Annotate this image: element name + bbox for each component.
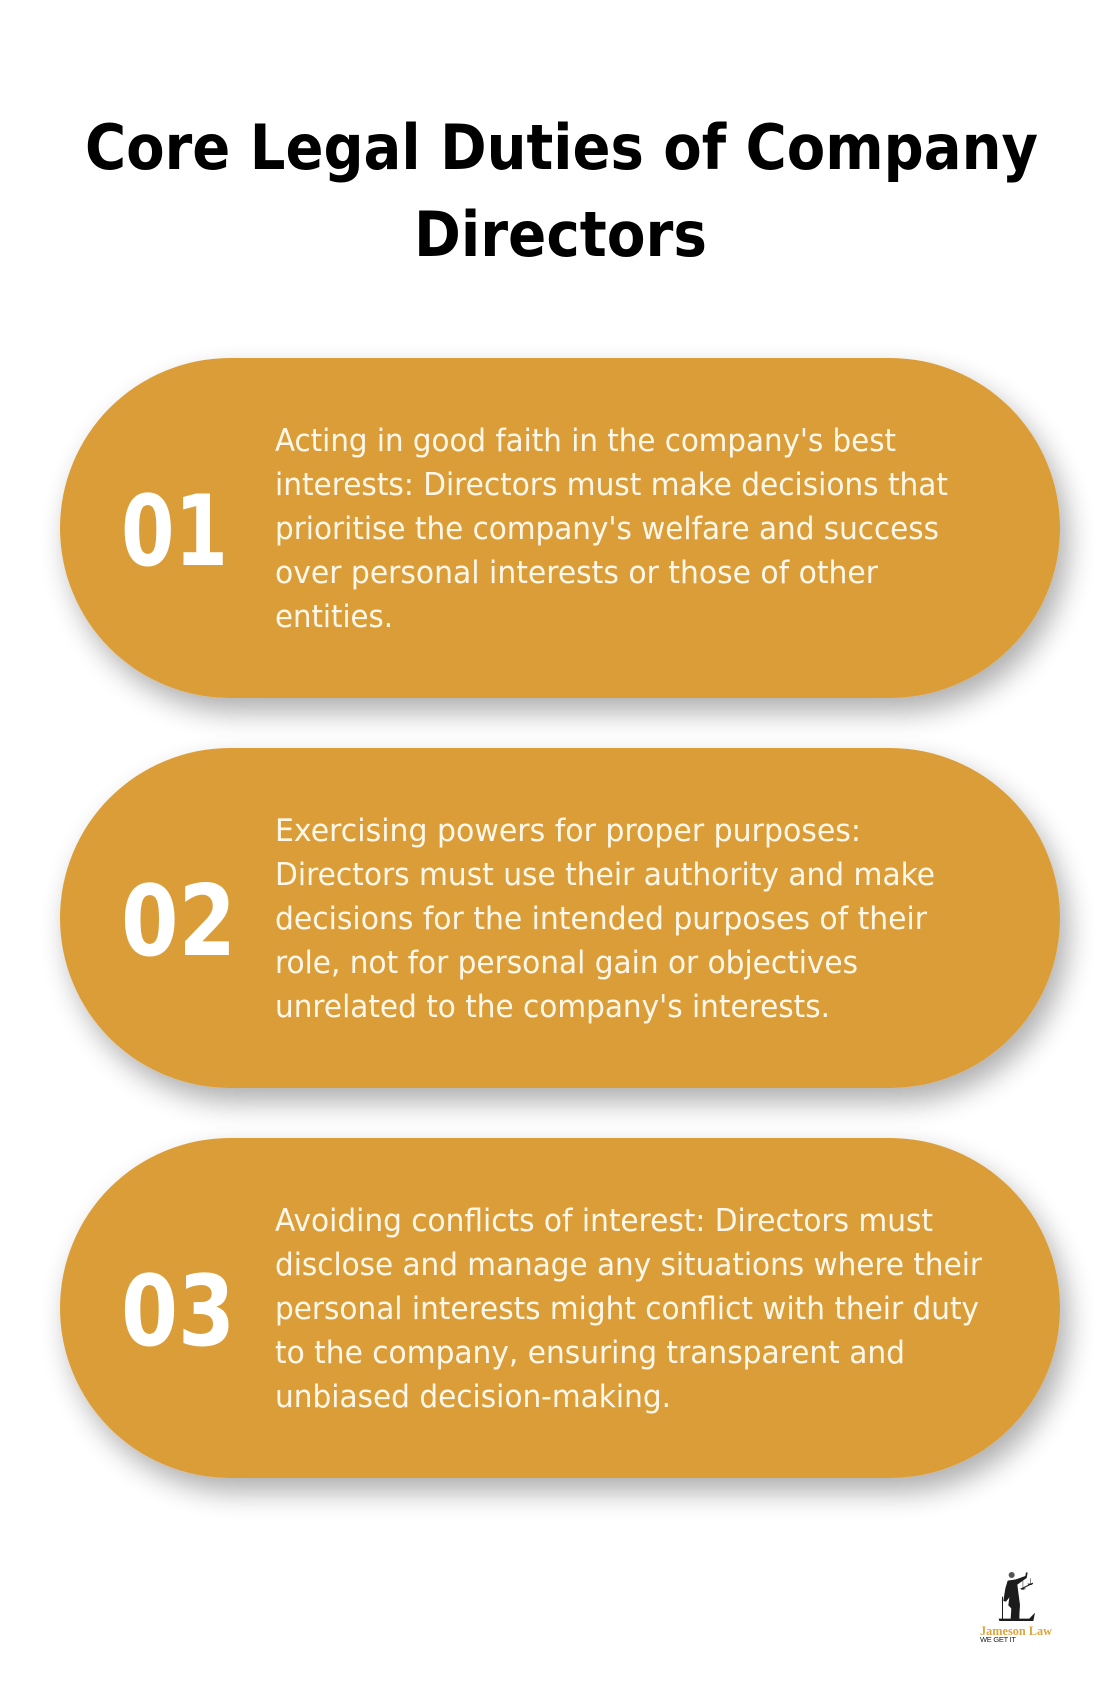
number 01: 01 (121, 475, 228, 589)
text: duty 02 description: Directors must use their authority and make (275, 857, 935, 893)
title (85, 111, 1038, 271)
text: duty 02 description: decisions for the intended purposes of their (275, 901, 927, 937)
logo: Jameson Law: WE GET IT (980, 1635, 1016, 1644)
logo: Jameson Law (980, 1572, 1053, 1644)
text: duty 03 description (275, 1203, 982, 1415)
logo: Jameson Law: Jameson Law (980, 1623, 1053, 1638)
number 03: 03 (121, 1255, 235, 1369)
text: duty 03 description: unbiased decision-making. (275, 1379, 671, 1415)
text: duty 03 description: disclose and manage any situations where their (275, 1247, 982, 1283)
text: duty 03 description: Avoiding conflicts of interest: Directors must (275, 1203, 933, 1239)
text: duty 03 description: to the company, ensuring transparent and (275, 1335, 905, 1371)
text: duty 01 description: over personal interests or those of other (275, 555, 878, 591)
text: duty 02 description (275, 813, 935, 1025)
text: duty 01 description (275, 423, 948, 635)
text: duty 01 description: Acting in good faith in the company's best (275, 423, 896, 459)
text: duty 01 description: interests: Directors must make decisions that (275, 467, 948, 503)
panel: duty 03 (60, 1138, 1060, 1478)
text: duty 01 description: entities. (275, 599, 393, 635)
text: duty 02 description: unrelated to the company's interests. (275, 989, 830, 1025)
text: duty 01 description: prioritise the company's welfare and success (275, 511, 939, 547)
text: duty 02 description: Exercising powers for proper purposes: (275, 813, 861, 849)
text: duty 02 description: role, not for personal gain or objectives (275, 945, 858, 981)
icon: lady justice (999, 1572, 1035, 1621)
number 02: 02 (121, 865, 236, 979)
title: Core Legal Duties of Company (85, 111, 1038, 184)
panel: duty 02 (60, 748, 1060, 1088)
text: duty 03 description: personal interests might conflict with their duty (275, 1291, 979, 1327)
panel: duty 01 (60, 358, 1060, 698)
title: Directors (414, 198, 707, 271)
